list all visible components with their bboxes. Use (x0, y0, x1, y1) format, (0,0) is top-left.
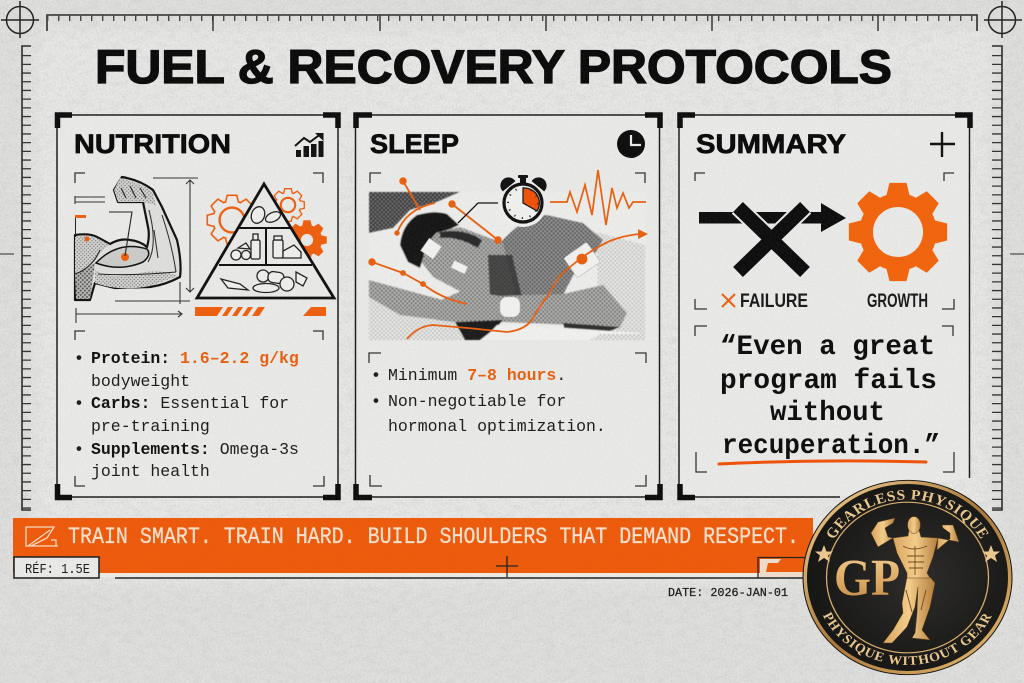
text: nutrition list: • (74, 440, 84, 459)
text: sleep list: hormonal optimization. (388, 417, 606, 436)
badge text: bottom: PHYSIQUE WITHOUT GEAR (822, 611, 992, 665)
label: failure: FAILURE (740, 291, 808, 312)
icon: clock (617, 130, 645, 158)
text: sleep list: Minimum 7–8 hours. (388, 366, 566, 385)
bodybuilder figure (871, 516, 959, 643)
reference tag: RÉF: 1.5E (25, 560, 90, 578)
text: nutrition list: bodyweight (91, 372, 190, 391)
banner slogan: TRAIN SMART. TRAIN HARD. BUILD SHOULDERS THAT DEMAND RESPECT. (68, 524, 799, 550)
stars (815, 545, 1000, 562)
panel: nutrition (57, 115, 338, 498)
quote underline (719, 461, 926, 464)
text: nutrition list: Carbs: Essential for (91, 394, 289, 413)
quote: without (770, 398, 885, 429)
text: nutrition list (74, 349, 299, 481)
sensor patches (421, 238, 600, 317)
text: sleep list: • (371, 366, 381, 385)
badge: gearless physique (802, 480, 1012, 676)
title: FUEL & RECOVERY PROTOCOLS (95, 40, 892, 93)
icon: plus (930, 132, 955, 157)
panel: sleep (356, 115, 660, 498)
monogram: GP (834, 550, 900, 607)
registration mark: top left (1, 1, 39, 38)
icon: set square (26, 527, 58, 546)
text: sleep list: Non-negotiable for (388, 392, 566, 411)
crosshair (496, 556, 518, 577)
small tag (758, 558, 805, 578)
label: growth: GROWTH (867, 291, 928, 312)
chart: heart-rate wave (550, 170, 646, 225)
reference tag (14, 557, 99, 578)
photo: man sleeping with sensors (369, 178, 646, 340)
text: nutrition list: pre-training (91, 417, 210, 436)
quote: program fails (720, 366, 937, 397)
text: nutrition list: joint health (91, 462, 210, 481)
date stamp: DATE: 2026-JAN-01 (668, 586, 788, 600)
panel: summary (679, 115, 970, 498)
text: nutrition list: • (74, 349, 84, 368)
text: nutrition list: • (74, 394, 84, 413)
heading: summary: SUMMARY (696, 129, 846, 159)
illustration: food pyramid (197, 184, 334, 298)
label: failure (722, 291, 808, 312)
quote: recuperation.” (722, 431, 940, 462)
quote: “Even a great (720, 332, 935, 363)
icon: rising bar chart (295, 133, 324, 157)
text: nutrition list: Supplements: Omega-3s (91, 440, 299, 459)
icon: orange gears (208, 189, 327, 260)
badge text: top: GEARLESS PHYSIQUE (827, 490, 989, 539)
heading: sleep: SLEEP (370, 129, 459, 159)
registration mark: top right (984, 1, 1022, 38)
icon: orange growth gear (849, 183, 947, 281)
quote (720, 332, 940, 462)
text: nutrition list: 1.6–2.2 g/kg (180, 349, 299, 368)
banner (13, 518, 813, 578)
orange sensor lines (369, 178, 646, 339)
heading: nutrition: NUTRITION (74, 129, 231, 159)
hazard strip (195, 307, 326, 316)
text: nutrition list: Protein: (91, 349, 170, 368)
text: sleep list (371, 366, 606, 436)
illustration: flexed arm with measurements (75, 177, 198, 323)
text: sleep list: • (371, 392, 381, 411)
icon: stopwatch (499, 175, 547, 227)
icon: blocked arrow (699, 203, 846, 272)
